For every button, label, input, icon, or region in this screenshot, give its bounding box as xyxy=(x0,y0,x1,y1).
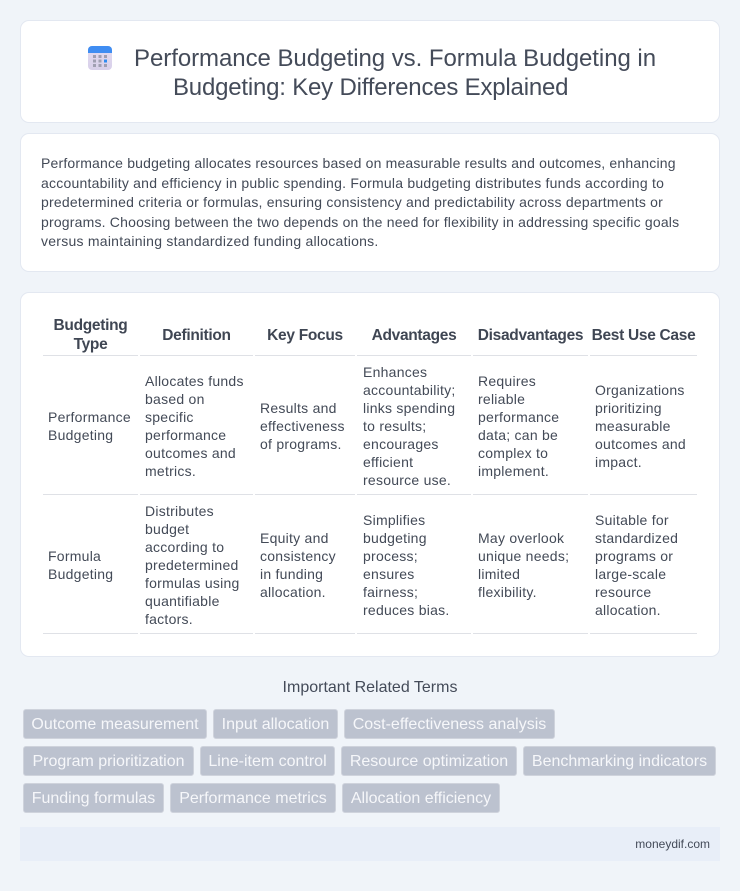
row 2: best use case: programs or xyxy=(595,548,673,564)
row 2: key focus xyxy=(260,530,336,600)
row 2: best use case: allocation. xyxy=(595,602,661,618)
row 1: best use case: impact. xyxy=(595,454,642,470)
related term tags xyxy=(23,709,716,813)
table header: Budgeting Type: Type xyxy=(74,336,107,353)
row 1: advantages: Enhances xyxy=(363,364,427,380)
row 1: key focus: Results and xyxy=(260,400,337,416)
footer source text: moneydif.com xyxy=(635,837,710,851)
row 2: key focus: Equity and xyxy=(260,530,329,546)
tag xyxy=(342,783,500,813)
title: Performance Budgeting vs. Formula Budgeting in xyxy=(134,45,656,72)
row 1: best use case xyxy=(595,382,686,470)
row 2: disadvantages: unique needs; xyxy=(478,548,569,564)
tag: Allocation efficiency xyxy=(351,790,491,807)
row 2: definition: budget xyxy=(145,521,189,537)
row 2: advantages: process; xyxy=(363,548,418,564)
row 1: key focus: effectiveness xyxy=(260,418,345,434)
row 1: disadvantages: implement. xyxy=(478,463,549,479)
row 1: budgeting type: Performance xyxy=(48,409,131,425)
title xyxy=(134,45,656,100)
row 2: budgeting type: Budgeting xyxy=(48,566,113,582)
table header: Budgeting Type xyxy=(54,317,127,353)
row 2: definition: quantifiable xyxy=(145,593,220,609)
row 1: best use case: prioritizing xyxy=(595,400,662,416)
row 1: disadvantages: reliable xyxy=(478,391,525,407)
panel: title card xyxy=(20,20,720,123)
row 2: disadvantages: flexibility. xyxy=(478,584,537,600)
text block: summary xyxy=(41,155,679,249)
row 1: key focus xyxy=(260,400,345,452)
tag xyxy=(200,746,335,776)
row 2: disadvantages: May overlook xyxy=(478,530,564,546)
row 2: best use case: Suitable for xyxy=(595,512,669,528)
row 1: definition: outcomes and xyxy=(145,445,236,461)
row 1: advantages: accountability; xyxy=(363,382,455,398)
icon: calendar xyxy=(88,46,112,70)
table header: Disadvantages: Disadvantages xyxy=(478,327,583,344)
row 1: definition: Allocates funds xyxy=(145,373,244,389)
row 2: definition: formulas using xyxy=(145,575,240,591)
row 2: best use case xyxy=(595,512,678,618)
row 2: advantages: fairness; xyxy=(363,584,418,600)
row 1: advantages: efficient xyxy=(363,454,413,470)
row 1: disadvantages xyxy=(478,373,559,479)
row 2: disadvantages: limited xyxy=(478,566,520,582)
row 2: advantages: reduces bias. xyxy=(363,602,450,618)
table header: Advantages: Advantages xyxy=(372,327,456,344)
row 2: definition: predetermined xyxy=(145,557,239,573)
tag xyxy=(23,709,207,739)
row 2: advantages: Simplifies xyxy=(363,512,425,528)
row 2: best use case: resource xyxy=(595,584,651,600)
row 1: advantages xyxy=(363,364,455,488)
tag: Performance metrics xyxy=(179,790,327,807)
table header: Best Use Case: Best Use Case xyxy=(592,327,695,344)
row 1: advantages: resource use. xyxy=(363,472,451,488)
row 1: advantages: to results; xyxy=(363,418,426,434)
row 1: disadvantages: Requires xyxy=(478,373,536,389)
tag: Funding formulas xyxy=(32,790,155,807)
row 1: disadvantages: data; can be xyxy=(478,427,558,443)
row 2: budgeting type xyxy=(48,548,113,582)
tag: Outcome measurement xyxy=(31,716,199,733)
tag: Cost-effectiveness analysis xyxy=(353,716,546,733)
heading: important related terms: Important Related Terms xyxy=(283,679,457,696)
row 2: key focus: consistency xyxy=(260,548,336,564)
panel: comparison table xyxy=(20,292,720,657)
tag xyxy=(344,709,555,739)
row 1: budgeting type xyxy=(48,409,131,443)
text block: summary: Performance budgeting allocates resources based on measurable results and outcomes, enhancing xyxy=(41,155,676,171)
tag xyxy=(523,746,716,776)
row 2: budgeting type: Formula xyxy=(48,548,101,564)
row 1: key focus: of programs. xyxy=(260,436,342,452)
table header: Budgeting Type: Budgeting xyxy=(54,317,127,334)
row 2: advantages xyxy=(363,512,450,618)
table header: Key Focus: Key Focus xyxy=(267,327,343,344)
row 1: budgeting type: Budgeting xyxy=(48,427,113,443)
row 1: definition: based on xyxy=(145,391,205,407)
text block: summary: versus maintaining standardized funding allocations. xyxy=(41,233,379,249)
row 2: advantages: ensures xyxy=(363,566,415,582)
row 1: definition: performance xyxy=(145,427,226,443)
row 2: definition: factors. xyxy=(145,611,193,627)
row 1: advantages: encourages xyxy=(363,436,439,452)
text block: summary: accountability and efficiency in public spending. Formula budgeting distributes funds according to xyxy=(41,174,664,190)
tag xyxy=(341,746,517,776)
title: Budgeting: Key Differences Explained xyxy=(173,74,568,100)
text block: summary: predetermined criteria or formulas, ensuring consistency and predictability across departments or xyxy=(41,194,663,210)
row 2: definition: according to xyxy=(145,539,224,555)
row 1: disadvantages: complex to xyxy=(478,445,548,461)
table header: Definition: Definition xyxy=(162,327,231,344)
row 2: best use case: standardized xyxy=(595,530,678,546)
row 1: disadvantages: performance xyxy=(478,409,559,425)
row 1: definition: metrics. xyxy=(145,463,196,479)
text block: summary: programs. Choosing between the two depends on the need for flexibility in addressing specific goals xyxy=(41,214,679,230)
panel: summary card xyxy=(20,133,720,272)
tag: Input allocation xyxy=(222,716,329,733)
row 1: best use case: outcomes and xyxy=(595,436,686,452)
footer bar xyxy=(20,827,720,861)
row 1: best use case: measurable xyxy=(595,418,671,434)
tag xyxy=(170,783,336,813)
row 1: best use case: Organizations xyxy=(595,382,685,398)
tag: Line-item control xyxy=(208,753,327,770)
row 2: key focus: allocation. xyxy=(260,584,326,600)
row 1: definition xyxy=(145,373,244,479)
row 1: advantages: links spending xyxy=(363,400,455,416)
tag: Program prioritization xyxy=(32,753,185,770)
tag: Benchmarking indicators xyxy=(532,753,707,770)
row 1: definition: specific xyxy=(145,409,194,425)
row 2: advantages: budgeting xyxy=(363,530,427,546)
tag xyxy=(23,783,164,813)
tag xyxy=(213,709,338,739)
tag: Resource optimization xyxy=(350,753,508,770)
row 2: definition: Distributes xyxy=(145,503,214,519)
row 2: key focus: in funding xyxy=(260,566,323,582)
row 2: disadvantages xyxy=(478,530,569,600)
row 2: best use case: large-scale xyxy=(595,566,666,582)
row 2: definition xyxy=(145,503,240,627)
tag xyxy=(23,746,194,776)
